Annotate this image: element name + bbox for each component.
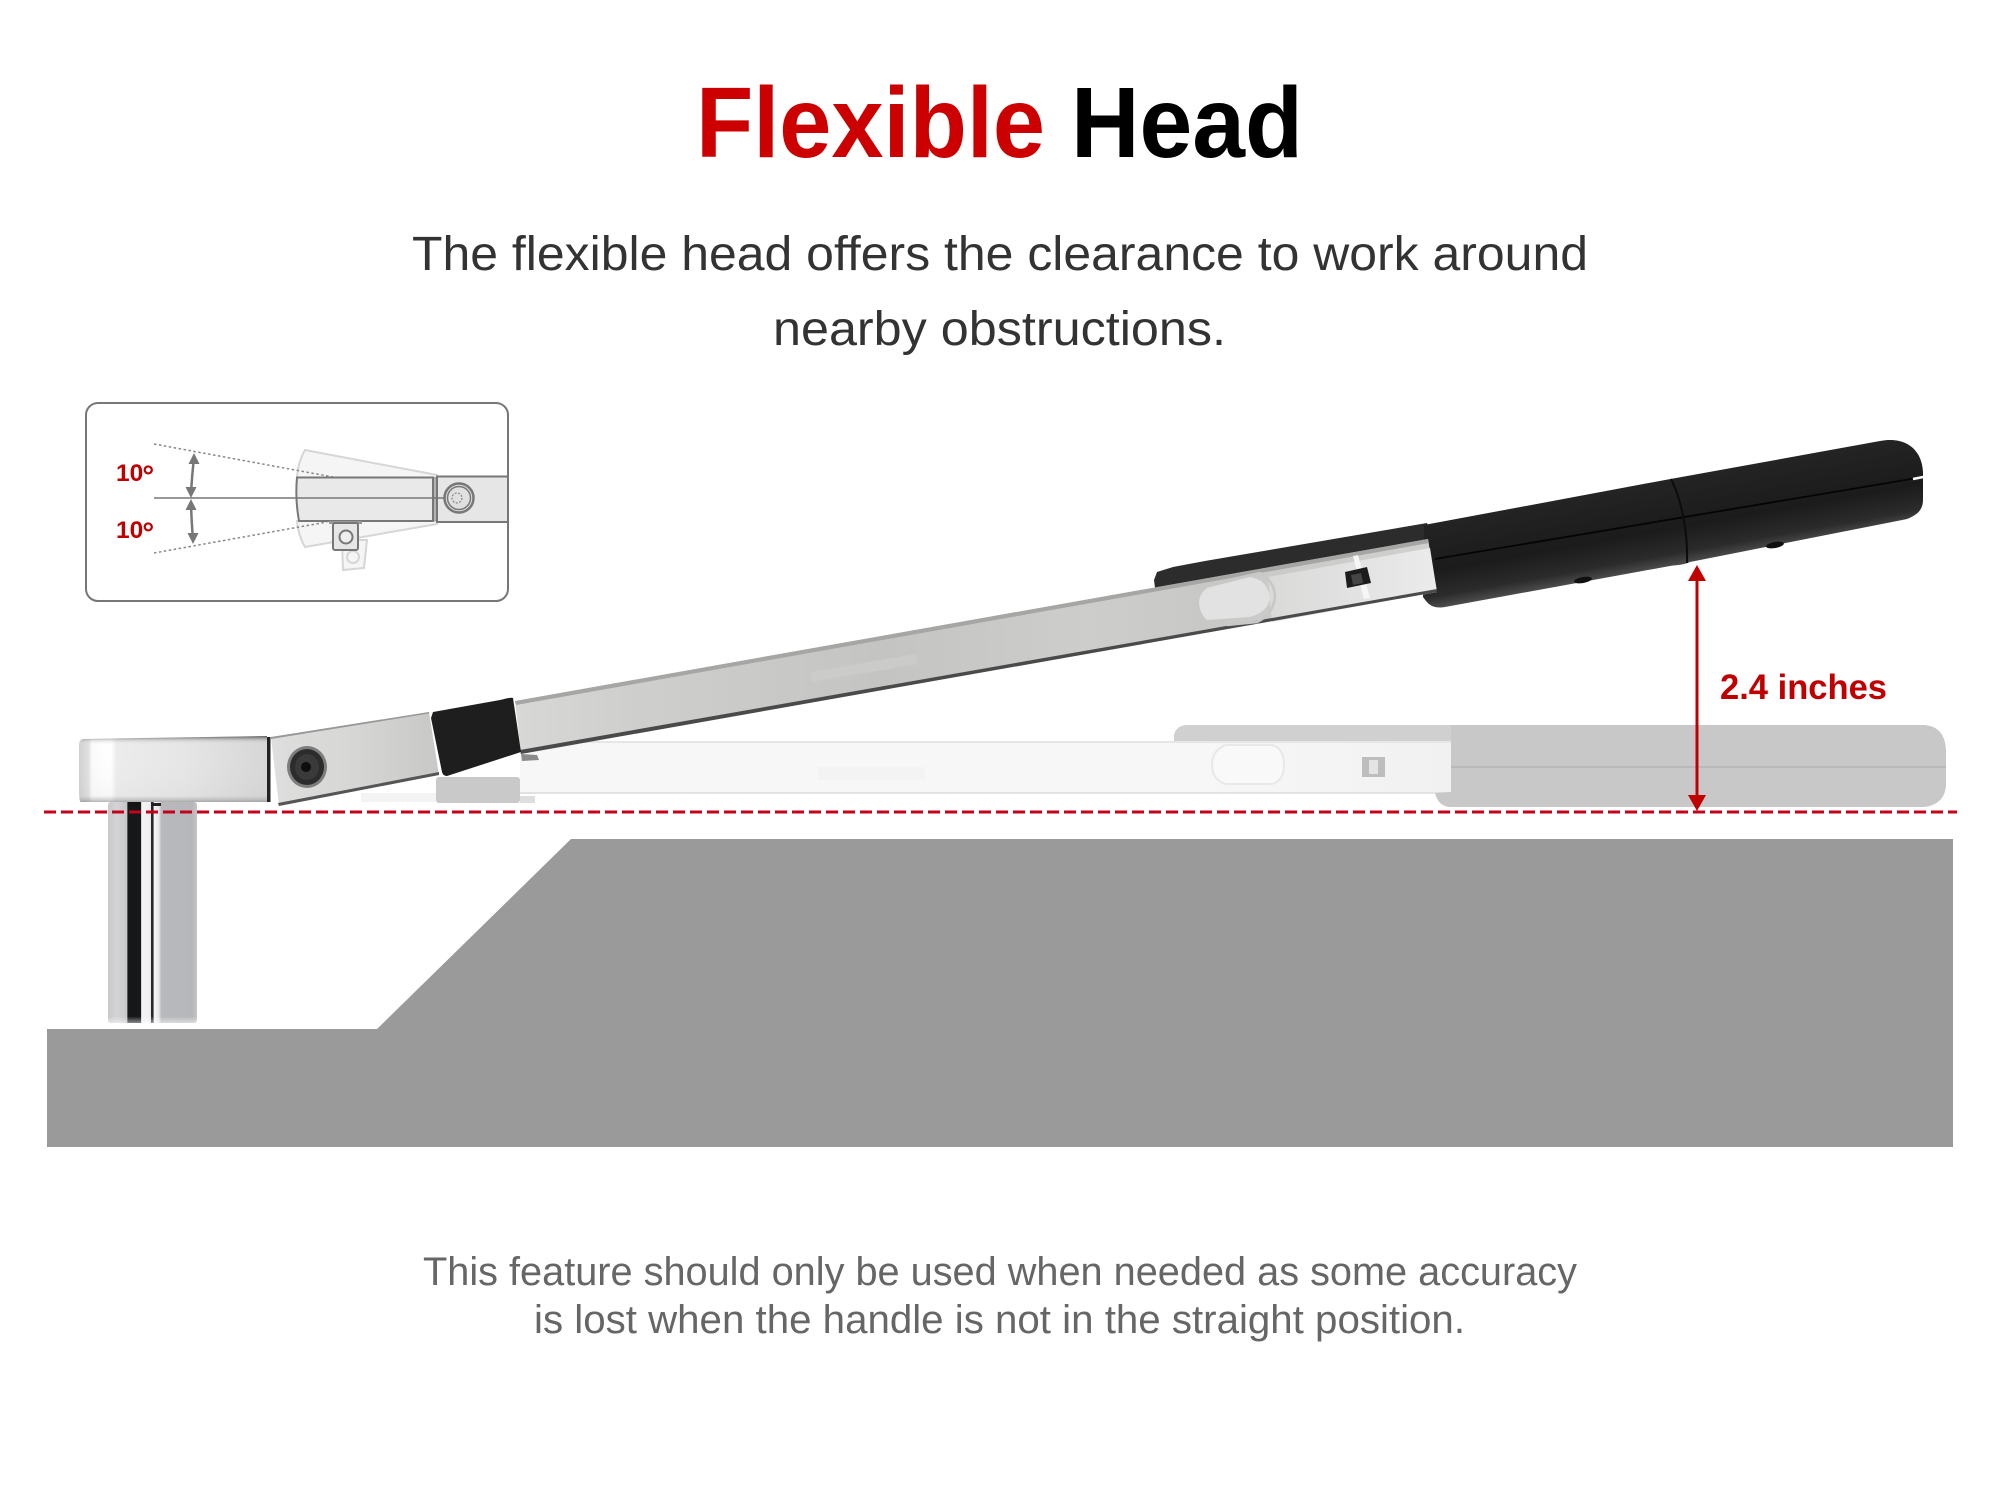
sleeve tab <box>521 754 539 761</box>
title: Flexible <box>696 67 1045 179</box>
lower angle label: ° <box>142 517 154 550</box>
lock window <box>1345 567 1371 588</box>
ground obstruction shape <box>47 839 1953 1147</box>
dotted angle limits <box>154 444 333 553</box>
square drive <box>329 521 362 550</box>
footnote <box>423 1250 1577 1342</box>
clearance label: 2.4 inches <box>1720 668 1887 707</box>
lower angle label: 10 <box>116 517 143 544</box>
upper angle arrow <box>186 453 200 498</box>
head body <box>296 478 433 521</box>
inset panel: angle detail <box>86 403 508 601</box>
upper angle label: 10 <box>116 460 143 487</box>
clearance height arrow <box>1688 565 1706 811</box>
socket <box>108 802 197 1023</box>
black sleeve <box>431 698 521 776</box>
title: Head <box>1071 67 1303 179</box>
title <box>696 67 1303 179</box>
wrench steel bar <box>515 539 1437 754</box>
upper angle label: ° <box>142 460 154 493</box>
reference dashed line <box>44 810 1957 814</box>
inset bolt <box>444 484 474 512</box>
footnote: This feature should only be used when needed as some accuracy <box>423 1250 1577 1294</box>
hinge bolt <box>287 746 327 788</box>
ghost head outlines <box>297 450 437 570</box>
slider button <box>1199 573 1275 625</box>
subtitle: nearby obstructions. <box>773 303 1226 356</box>
lower angle arrow <box>186 499 198 544</box>
subtitle: The flexible head offers the clearance to work around <box>412 228 1588 281</box>
wrench handle grip <box>1154 440 1923 610</box>
ratchet head <box>79 736 270 807</box>
footnote: is lost when the handle is not in the straight position. <box>534 1298 1465 1342</box>
subtitle <box>412 228 1588 356</box>
hinge plate body <box>437 476 507 522</box>
center axis <box>154 497 457 499</box>
flex hinge plate <box>271 712 439 806</box>
ghost wrench in straight position <box>361 725 1946 807</box>
